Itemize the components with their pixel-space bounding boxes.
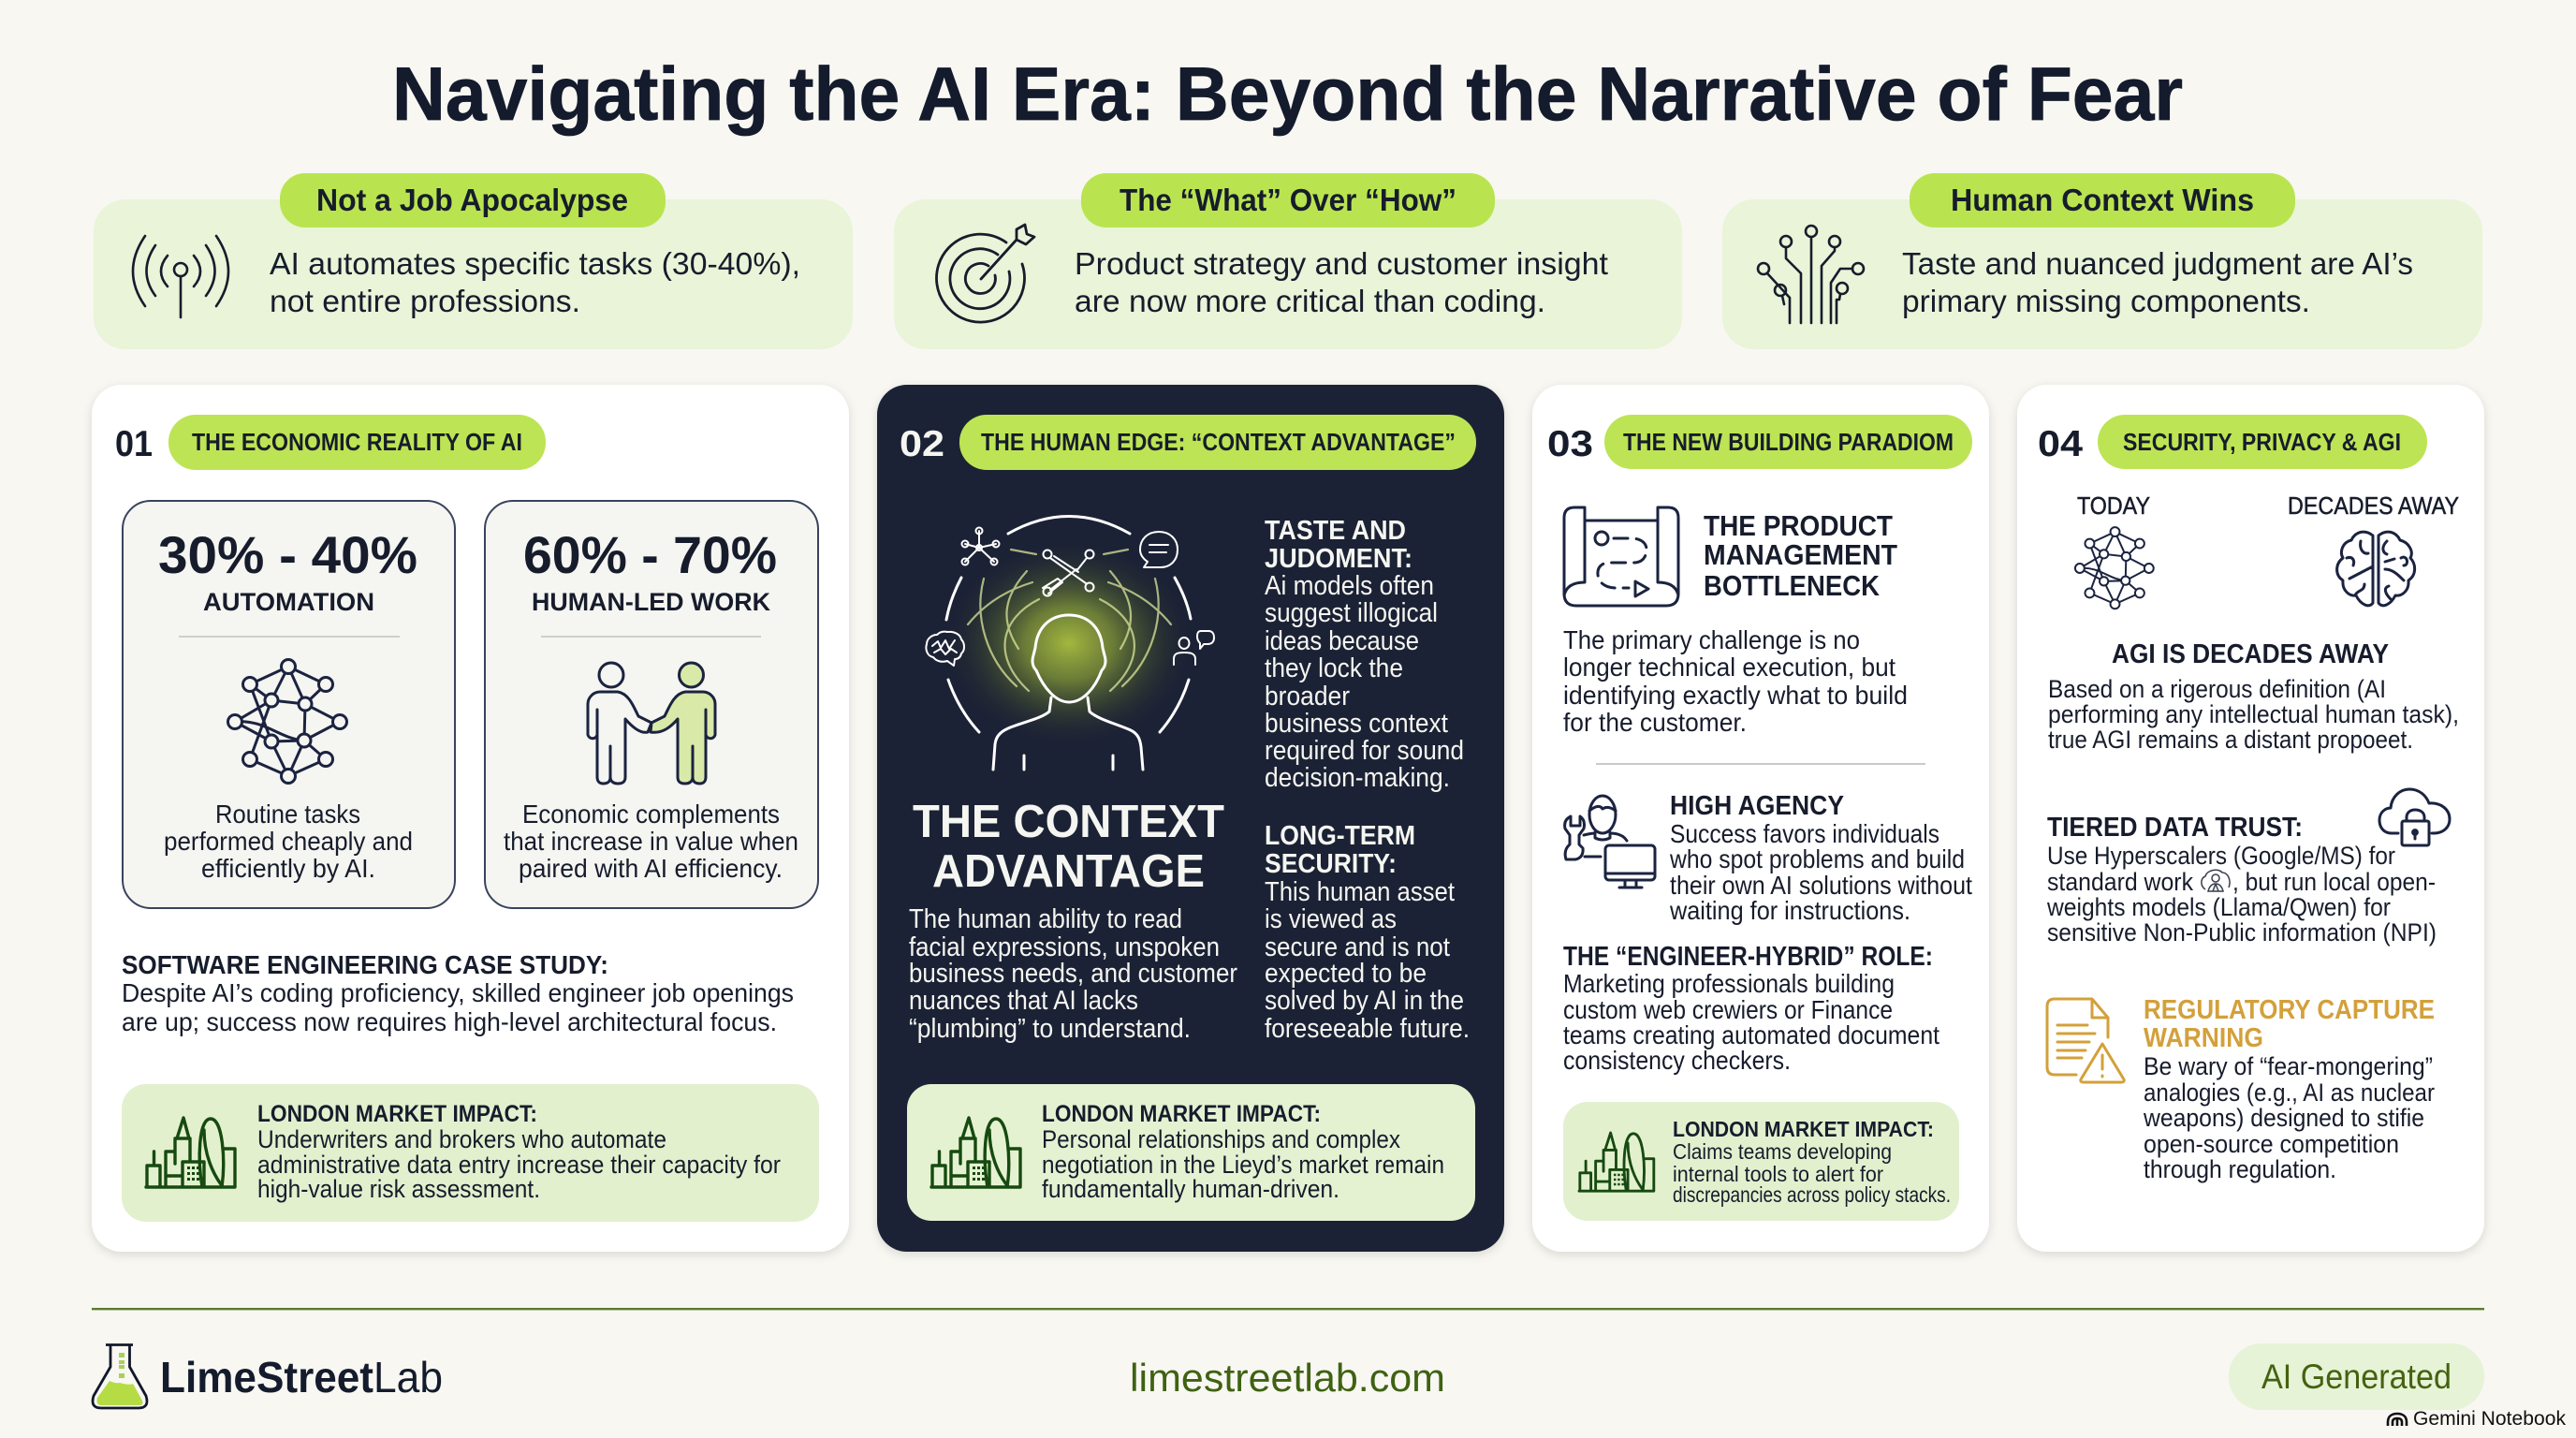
icon: circuit tree xyxy=(1758,226,1864,323)
callout: london market impact: administrative data entry increase their capacity for xyxy=(257,1151,781,1179)
agi text: true AGI remains a distant propoeet. xyxy=(2048,726,2413,754)
callout: london market impact xyxy=(907,1084,1475,1221)
callout: london market impact: fundamentally human-driven. xyxy=(1042,1175,1339,1203)
heading: product management bottleneck: BOTTLENECK xyxy=(1704,570,1880,602)
summary card: not a job apocalypse xyxy=(94,173,853,349)
callout: london market impact: Claims teams developing xyxy=(1673,1139,1892,1164)
taste and judgment column xyxy=(1265,516,1464,793)
engineer-hybrid role text: consistency checkers. xyxy=(1563,1046,1791,1075)
tiered data trust text: weights models (Llama/Qwen) for xyxy=(2046,893,2391,921)
section pill: THE NEW BUILDING PARADIOM xyxy=(1623,428,1954,456)
callout: london market impact: high-value risk assessment. xyxy=(257,1175,540,1203)
pill heading: Not a Job Apocalypse xyxy=(316,183,628,217)
callout: london market impact: internal tools to alert for xyxy=(1673,1162,1883,1186)
context description: The human ability to read xyxy=(909,904,1182,934)
stat box: automation: performed cheaply and xyxy=(164,827,413,856)
section pill xyxy=(1604,415,1972,469)
regulatory capture warning: weapons) designed to stifie xyxy=(2143,1104,2424,1132)
tiered data trust text: Use Hyperscalers (Google/MS) for xyxy=(2047,842,2395,870)
high agency text: HIGH AGENCY xyxy=(1670,791,1844,821)
regulatory capture warning: Be wary of “fear-mongering” xyxy=(2144,1052,2433,1080)
context description: “plumbing” to understand. xyxy=(909,1014,1191,1044)
icon: neural network xyxy=(2075,527,2154,609)
footer logo: flask and wordmark: Lab xyxy=(373,1353,443,1401)
high agency text xyxy=(1669,791,1972,925)
icon: flask xyxy=(93,1344,147,1408)
summary text: Taste and nuanced judgment are AI’s xyxy=(1902,246,2413,281)
icon: person with wrench and monitor xyxy=(1565,796,1655,888)
callout: london market impact: LONDON MARKET IMPACT: xyxy=(1042,1101,1321,1127)
section pill xyxy=(168,415,546,470)
long-term security column: SECURITY: xyxy=(1265,849,1397,879)
heading: the context advantage: THE CONTEXT xyxy=(913,797,1224,847)
stat box: human-led work: 60% - 70% xyxy=(523,525,777,584)
callout: london market impact xyxy=(122,1084,819,1222)
long-term security column: foreseeable future. xyxy=(1265,1014,1470,1044)
case study text: are up; success now requires high-level architectural focus. xyxy=(122,1007,777,1036)
stat box: human-led work: Economic complements xyxy=(522,800,780,829)
engineer-hybrid role text: Marketing professionals building xyxy=(1563,969,1895,998)
section pill: THE HUMAN EDGE: “CONTEXT ADVANTAGE” xyxy=(981,428,1456,456)
regulatory capture warning: open-source competition xyxy=(2144,1130,2399,1158)
taste and judgment column: ideas because xyxy=(1265,626,1419,656)
icon: two people shaking hands xyxy=(588,663,715,784)
taste and judgment column: JUDOMENT: xyxy=(1265,544,1412,574)
section number: 02 xyxy=(900,424,944,464)
section number: 04 xyxy=(2038,424,2083,464)
tiered data trust text: standard work xyxy=(2047,868,2194,896)
icon: small cloud with person xyxy=(2202,870,2230,891)
icon: network node xyxy=(962,528,1000,565)
high agency text: Success favors individuals xyxy=(1670,819,1939,848)
taste and judgment column: required for sound xyxy=(1265,736,1464,766)
ai generated badge: AI Generated xyxy=(2261,1357,2452,1396)
section pill xyxy=(959,415,1476,470)
tiered data trust text: , but run local open- xyxy=(2232,868,2436,896)
heading: product management bottleneck: THE PRODUCT xyxy=(1704,510,1893,542)
context description: facial expressions, unspoken xyxy=(909,932,1220,962)
stat box: automation: AUTOMATION xyxy=(203,588,374,616)
icon: london skyline xyxy=(146,1118,235,1187)
summary text xyxy=(1902,246,2413,318)
callout: london market impact: negotiation in the Lieyd’s market remain xyxy=(1042,1151,1444,1179)
context description: nuances that AI lacks xyxy=(909,986,1138,1016)
pill heading: The “What” Over “How” xyxy=(1120,183,1456,217)
icon: warning document xyxy=(2047,999,2124,1082)
pill heading xyxy=(1081,173,1495,227)
icon: neural network xyxy=(228,659,346,783)
pill heading xyxy=(280,173,666,227)
engineer-hybrid role text: THE “ENGINEER-HYBRID” ROLE: xyxy=(1563,942,1933,972)
panel 03: new building paradigm xyxy=(1532,385,1989,1252)
long-term security column: expected to be xyxy=(1265,959,1427,989)
callout: london market impact: Underwriters and brokers who automate xyxy=(257,1125,666,1153)
high agency text: who spot problems and build xyxy=(1669,844,1965,873)
stat box: human-led work xyxy=(485,501,818,908)
regulatory capture warning: through regulation. xyxy=(2144,1155,2336,1183)
icon: crossed tools xyxy=(1043,550,1093,595)
regulatory capture warning: WARNING xyxy=(2144,1023,2263,1053)
section number: 01 xyxy=(115,424,153,464)
timeline labels xyxy=(2077,492,2459,520)
icon: target with dart xyxy=(936,225,1034,322)
footer website: limestreetlab.com xyxy=(1130,1356,1445,1400)
pill heading: Human Context Wins xyxy=(1951,183,2254,217)
stat box: human-led work: HUMAN-LED WORK xyxy=(532,588,770,616)
case study text: Despite AI’s coding proficiency, skilled engineer job openings xyxy=(122,978,794,1007)
tiered data trust text: sensitive Non-Public information (NPI) xyxy=(2047,918,2437,946)
agi text: AGI IS DECADES AWAY xyxy=(2112,639,2389,669)
icon: london skyline xyxy=(931,1118,1020,1187)
summary text: not entire professions. xyxy=(270,284,580,318)
callout: london market impact xyxy=(1563,1102,1959,1221)
ai generated badge xyxy=(2229,1343,2484,1410)
bottleneck text: longer technical execution, but xyxy=(1563,653,1895,682)
bottleneck text xyxy=(1563,625,1908,737)
summary text xyxy=(1075,246,1608,318)
icon: cloud with padlock xyxy=(2379,789,2450,845)
agi text xyxy=(2048,639,2459,754)
long-term security column: secure and is not xyxy=(1265,932,1450,962)
stat box: human-led work: paired with AI efficiency. xyxy=(519,854,783,883)
icon: brain xyxy=(2337,532,2415,606)
heading: the context advantage xyxy=(913,797,1224,897)
agi text: Based on a rigerous definition (AI xyxy=(2048,675,2386,703)
bottleneck text: for the customer. xyxy=(1563,708,1747,737)
icon: brain xyxy=(926,632,964,666)
case study text xyxy=(122,950,794,1036)
regulatory capture warning xyxy=(2143,995,2435,1183)
pill heading xyxy=(1910,173,2295,227)
heading: product management bottleneck: MANAGEMENT xyxy=(1704,539,1897,571)
callout: london market impact: Personal relationships and complex xyxy=(1042,1125,1400,1153)
high agency text: waiting for instructions. xyxy=(1669,896,1910,925)
stat box: automation xyxy=(123,501,455,908)
tiered data trust text xyxy=(2046,813,2437,946)
footer logo: flask and wordmark xyxy=(93,1344,443,1408)
regulatory capture warning: REGULATORY CAPTURE xyxy=(2144,995,2435,1025)
taste and judgment column: TASTE AND xyxy=(1265,516,1406,546)
long-term security column xyxy=(1265,821,1470,1044)
section pill xyxy=(2098,415,2427,469)
heading: product management bottleneck xyxy=(1704,510,1897,602)
gemini notebook mark: Gemini Notebook xyxy=(2413,1408,2566,1430)
summary text xyxy=(270,246,800,318)
bottleneck text: The primary challenge is no xyxy=(1563,625,1860,654)
long-term security column: This human asset xyxy=(1265,877,1455,907)
footer logo: flask and wordmark: LimeStreet xyxy=(160,1353,373,1401)
taste and judgment column: Ai models often xyxy=(1265,571,1434,601)
case study text: SOFTWARE ENGINEERING CASE STUDY: xyxy=(122,950,608,979)
icon: person and chat xyxy=(1174,631,1214,665)
icon: product roadmap scroll xyxy=(1564,507,1678,606)
bottleneck text: identifying exactly what to build xyxy=(1563,681,1908,710)
engineer-hybrid role text: custom web crewiers or Finance xyxy=(1563,995,1893,1024)
high agency text: their own AI solutions without xyxy=(1670,871,1972,900)
section pill: SECURITY, PRIVACY & AGI xyxy=(2123,428,2401,456)
engineer-hybrid role text: teams creating automated document xyxy=(1563,1020,1939,1049)
stat box: human-led work: that increase in value when xyxy=(504,827,798,856)
icon: london skyline xyxy=(1579,1133,1654,1191)
summary card: what over how xyxy=(894,173,1682,349)
tiered data trust text: TIERED DATA TRUST: xyxy=(2047,813,2303,843)
panel 01: economic reality of AI xyxy=(92,385,849,1252)
agi text: performing any intellectual human task), xyxy=(2048,700,2459,728)
timeline labels: DECADES AWAY xyxy=(2288,492,2459,520)
callout: london market impact: LONDON MARKET IMPACT: xyxy=(1673,1117,1934,1141)
icon: antenna signal xyxy=(133,236,228,317)
summary text: Product strategy and customer insight xyxy=(1075,246,1608,281)
summary text: are now more critical than coding. xyxy=(1075,284,1545,318)
stat box: automation: efficiently by AI. xyxy=(201,854,375,883)
context description: business needs, and customer xyxy=(909,959,1237,989)
long-term security column: solved by AI in the xyxy=(1265,986,1464,1016)
summary text: primary missing components. xyxy=(1902,284,2310,318)
timeline labels: TODAY xyxy=(2077,492,2150,520)
long-term security column: is viewed as xyxy=(1265,904,1397,934)
stat box: automation: Routine tasks xyxy=(215,800,360,829)
summary text: AI automates specific tasks (30-40%), xyxy=(270,246,800,281)
taste and judgment column: broader xyxy=(1265,682,1350,712)
callout: london market impact: LONDON MARKET IMPACT: xyxy=(257,1101,537,1127)
engineer-hybrid role text xyxy=(1563,942,1939,1075)
icon: speech bubble xyxy=(1140,532,1178,567)
context description xyxy=(909,904,1237,1044)
panel 02: human edge, context advantage xyxy=(877,385,1504,1252)
section number: 03 xyxy=(1547,424,1593,464)
heading: the context advantage: ADVANTAGE xyxy=(932,846,1205,897)
taste and judgment column: decision-making. xyxy=(1265,763,1450,793)
summary card: human context wins xyxy=(1722,173,2482,349)
panel 04: security, privacy and AGI xyxy=(2017,385,2484,1252)
taste and judgment column: business context xyxy=(1265,709,1448,739)
taste and judgment column: suggest illogical xyxy=(1265,598,1438,628)
taste and judgment column: they lock the xyxy=(1265,653,1403,683)
regulatory capture warning: analogies (e.g., AI as nuclear xyxy=(2144,1078,2435,1107)
long-term security column: LONG-TERM xyxy=(1265,821,1415,851)
title: Navigating the AI Era: Beyond the Narrative of Fear xyxy=(392,52,2183,137)
stat box: automation: 30% - 40% xyxy=(158,525,417,584)
callout: london market impact: discrepancies across policy stacks. xyxy=(1673,1182,1951,1207)
illustration: head with context rings xyxy=(926,517,1214,770)
section pill: THE ECONOMIC REALITY OF AI xyxy=(192,428,522,456)
